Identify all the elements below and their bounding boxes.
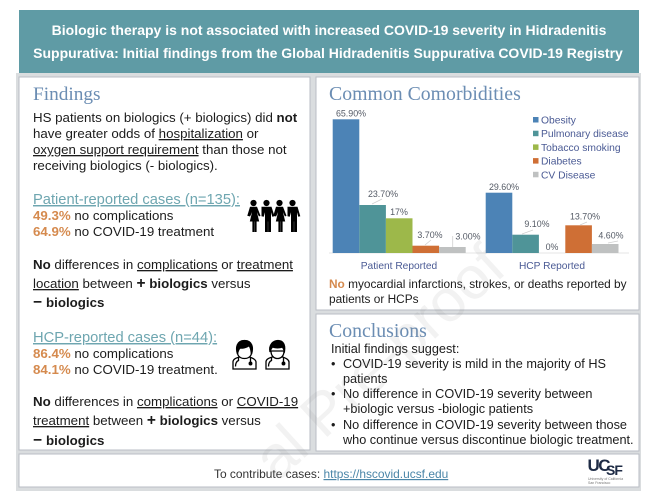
data labels: 65.90% bbox=[336, 108, 366, 118]
data labels: 9.10% bbox=[524, 219, 550, 229]
legend bbox=[533, 116, 629, 181]
text block: findings summary: oxygen support requirement than those not bbox=[33, 142, 287, 157]
text block: conclusions list: No difference in COVID-19 severity between those bbox=[343, 418, 627, 432]
icon: group of patients bbox=[247, 200, 300, 232]
data labels: 3.00% bbox=[455, 232, 481, 242]
bar chart: patient reported and HCP reported bbox=[329, 108, 629, 272]
text block: conclusions list: No difference in COVID-19 severity between bbox=[343, 387, 592, 401]
text block: patient-reported differences: − bbox=[33, 294, 42, 311]
text: contribute link: To contribute cases: https://hscovid.ucsf.edu bbox=[214, 467, 448, 481]
text block: findings summary: receiving biologics (- biologics). bbox=[33, 158, 218, 173]
text block: conclusions list: who continue versus discontinue biologic treatment. bbox=[342, 433, 634, 447]
legend: CV Disease bbox=[541, 170, 596, 181]
data labels: 17% bbox=[390, 207, 408, 217]
legend: Diabetes bbox=[541, 157, 582, 168]
text block: HCP-reported cases: 86.4% no complications bbox=[33, 346, 174, 361]
header banner bbox=[19, 10, 639, 73]
text block: patient-reported cases: 64.9% no COVID-19 treatment bbox=[33, 224, 214, 239]
text block: patient-reported cases: Patient-reported cases (n=135): bbox=[33, 192, 240, 208]
panel: common comorbidities bbox=[316, 77, 639, 310]
logo: UCSF: University of California bbox=[588, 477, 623, 481]
text block: patient-reported cases bbox=[33, 192, 240, 239]
data labels: 13.70% bbox=[570, 212, 600, 222]
text block: findings summary: HS patients on biologics (+ biologics) did not bbox=[33, 110, 298, 125]
header banner: Biologic therapy is not associated with increased COVID-19 severity in Hidradenitis bbox=[52, 22, 607, 38]
text block: conclusions list: • bbox=[331, 418, 335, 432]
text block: conclusions list: Initial findings suggest: bbox=[331, 342, 459, 356]
text block: patient-reported differences bbox=[33, 257, 293, 311]
text block: HCP-reported cases bbox=[33, 330, 218, 377]
text block: HCP-reported differences: biologics bbox=[46, 433, 104, 448]
text block: patient-reported differences: location between + biologics versus bbox=[33, 275, 251, 292]
icon: two clinicians bbox=[233, 340, 289, 369]
heading: conclusions: Conclusions bbox=[329, 320, 427, 342]
leader lines bbox=[372, 199, 618, 247]
legend: Obesity bbox=[541, 116, 577, 126]
logo: UCSF: UC bbox=[588, 456, 610, 475]
heading: common comorbidities: Common Comorbidities bbox=[329, 83, 521, 105]
logo: UCSF: SF bbox=[606, 462, 623, 478]
text block: conclusions list bbox=[331, 342, 634, 447]
legend: Pulmonary disease bbox=[541, 129, 629, 140]
logo: UCSF bbox=[588, 456, 623, 485]
text block: conclusions list: • bbox=[331, 387, 335, 401]
watermark: journal pre-proof: al Pre-proof bbox=[241, 232, 517, 493]
text block: conclusions list: +biologic versus -biologic patients bbox=[343, 402, 533, 416]
text block: findings summary: have greater odds of hospitalization or bbox=[33, 126, 259, 141]
category labels: HCP Reported bbox=[519, 261, 585, 272]
heading: findings: Findings bbox=[33, 84, 101, 105]
data labels: 4.60% bbox=[598, 230, 624, 240]
text block: HCP-reported differences: − bbox=[33, 432, 42, 449]
logo: UCSF: San Francisco bbox=[588, 481, 610, 485]
panel: findings bbox=[19, 77, 310, 450]
text block: conclusions list: patients bbox=[343, 372, 387, 386]
data labels: 29.60% bbox=[489, 182, 519, 192]
header banner: Suppurativa: Initial findings from the Global Hidradenitis Suppurativa COVID-19 Registry bbox=[33, 45, 623, 61]
panel: contribute footer bbox=[19, 454, 639, 487]
text block: patient-reported differences: No differences in complications or treatment bbox=[33, 257, 293, 272]
bars: patient reported bbox=[333, 119, 466, 253]
panel: conclusions bbox=[316, 314, 639, 451]
text block: HCP-reported differences bbox=[33, 394, 298, 449]
text block: HCP-reported differences: No differences in complications or COVID-19 bbox=[33, 394, 298, 409]
data labels: 23.70% bbox=[368, 189, 398, 199]
text block: patient-reported differences: biologics bbox=[46, 295, 104, 310]
category labels: Patient Reported bbox=[361, 261, 438, 272]
text block: HCP-reported cases: HCP-reported cases (n=44): bbox=[33, 330, 217, 346]
text block: no events reported: patients or HCPs bbox=[329, 292, 419, 306]
text block: no events reported bbox=[329, 277, 627, 306]
data labels bbox=[336, 108, 624, 252]
legend: Tobacco smoking bbox=[541, 143, 621, 154]
category labels bbox=[361, 261, 585, 272]
text block: HCP-reported cases: 84.1% no COVID-19 treatment. bbox=[33, 362, 218, 377]
text block: findings summary bbox=[33, 110, 298, 173]
text block: conclusions list: COVID-19 severity is mild in the majority of HS bbox=[343, 357, 606, 371]
data labels: 0% bbox=[546, 242, 559, 252]
data labels: 3.70% bbox=[417, 230, 443, 240]
text block: HCP-reported differences: treatment between + biologics versus bbox=[33, 412, 261, 429]
text block: conclusions list: • bbox=[331, 357, 335, 371]
text block: no events reported: No myocardial infarctions, strokes, or deaths reported by bbox=[329, 277, 627, 291]
bars: HCP reported bbox=[486, 193, 618, 253]
text block: patient-reported cases: 49.3% no complications bbox=[33, 208, 174, 223]
